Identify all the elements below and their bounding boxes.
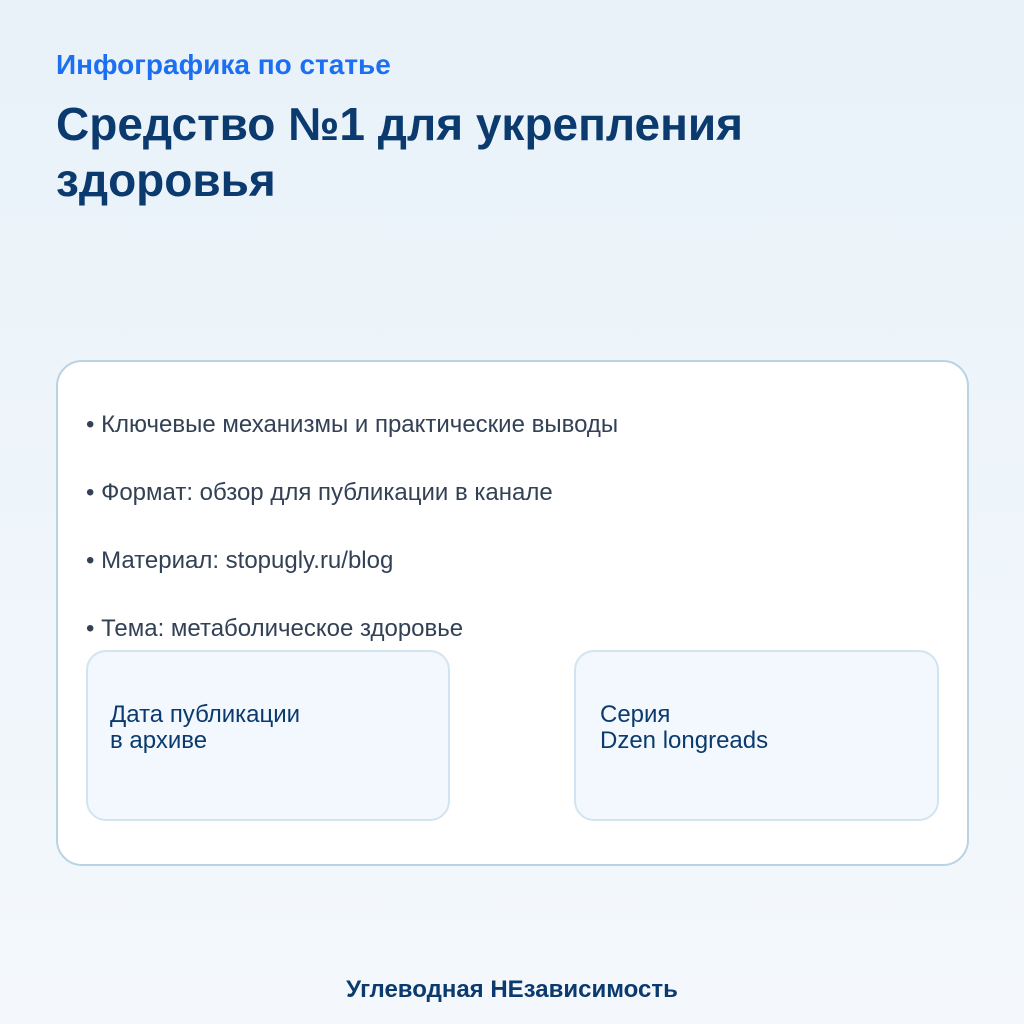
bullet: material: • Материал: stopugly.ru/blog — [86, 547, 393, 574]
footer: Углеводная НЕзависимость — [346, 976, 678, 1003]
series text: Dzen longreads — [600, 727, 768, 754]
publication date text: в архиве — [110, 727, 207, 754]
title: Средство №1 для укрепления — [56, 98, 743, 150]
panel: publication date — [86, 650, 450, 821]
panel: main card — [56, 360, 969, 866]
series text — [600, 701, 768, 754]
bullet: key mechanisms: • Ключевые механизмы и практические выводы — [86, 411, 618, 438]
eyebrow heading: Инфографика по статье — [56, 49, 391, 80]
panel: series — [574, 650, 939, 821]
series text: Серия — [600, 701, 670, 728]
publication date text — [110, 701, 300, 754]
publication date text: Дата публикации — [110, 701, 300, 728]
bullet: format: • Формат: обзор для публикации в канале — [86, 479, 553, 506]
title: здоровья — [56, 154, 276, 206]
title — [56, 98, 743, 206]
bullet: topic: • Тема: метаболическое здоровье — [86, 615, 463, 642]
